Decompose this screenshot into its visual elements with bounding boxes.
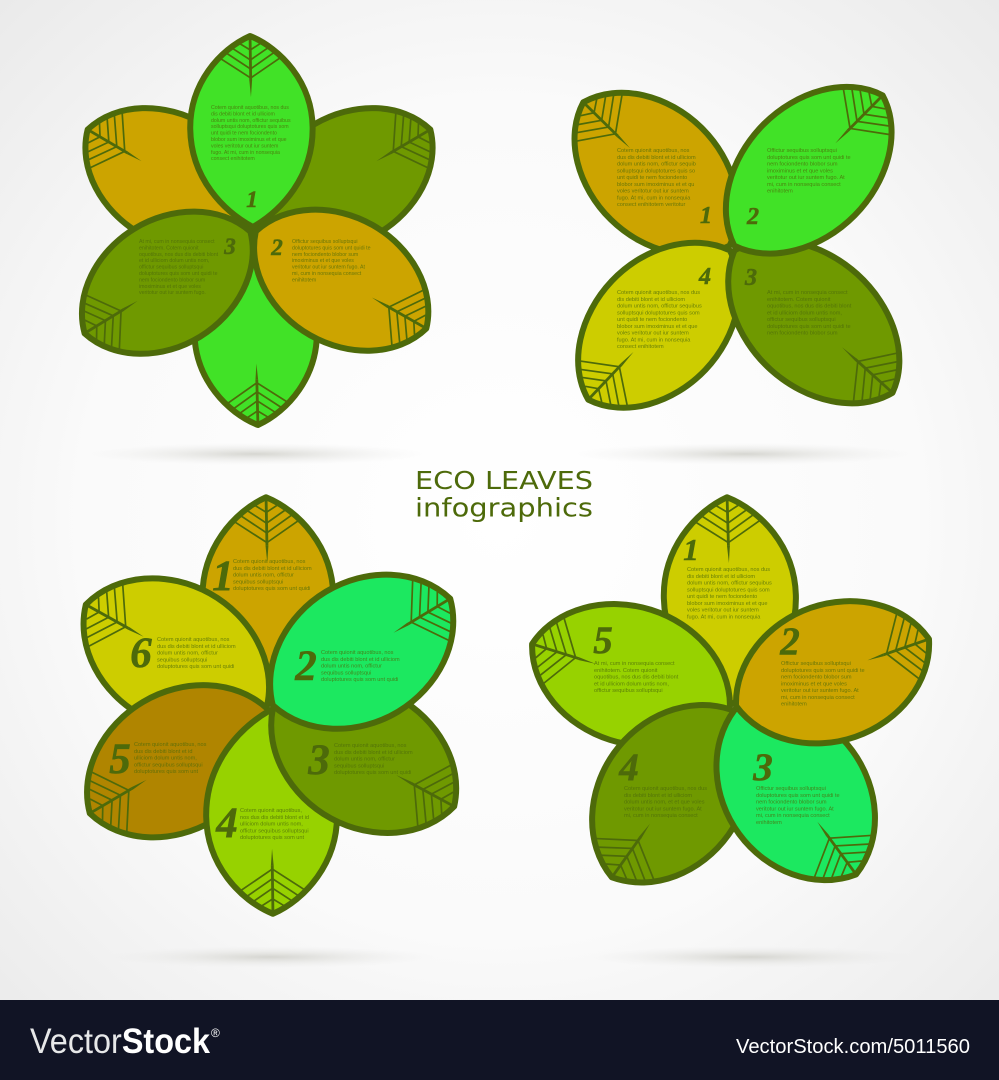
text: leaf 2: sequibus solluptsqui (321, 670, 371, 676)
text: leaf 2: Cotem quionit aquotibus, nos (321, 650, 394, 656)
text: leaf 1: voles veritotur out iur suntem (211, 143, 279, 149)
leaf 3: olive green (240, 648, 487, 867)
text: leaf 4: dis debiti blont et id ulliciom (624, 793, 692, 799)
text: leaf 3: Cotem quionit aquotibus, nos (334, 743, 407, 749)
text: leaf 1: fugo. At mi, cum in nonsequia (617, 195, 691, 201)
text: leaf 3: enihitotem. Cotem quionit (139, 245, 199, 251)
number 3: 3 (744, 265, 757, 291)
shadow: top right flower (575, 443, 915, 465)
text: leaf 4: Cotem quionit aquotibus, nos dus (624, 786, 707, 792)
text: leaf 1: doluptotures quis som unt quidi (233, 586, 310, 592)
leaf 3: olive green (52, 178, 283, 387)
text: leaf 2: imoximinus et et que voles (292, 258, 354, 264)
text: leaf 1: Cotem quionit aquotibus, nos (617, 148, 690, 154)
text: leaf 1: voles veritotur out iur suntem (687, 608, 759, 614)
number 5: 5 (109, 736, 131, 783)
text: leaf 1: dus dis debiti blont et id ulliciom (617, 155, 696, 161)
leaf 1: yellow (661, 495, 799, 706)
text: leaf 1: solluptsqui doluptotures quis so (617, 168, 695, 174)
leaf 6: yellow (52, 543, 301, 767)
text: leaf 1: Cotem quionit aquotibus, nos (233, 559, 306, 565)
number 6: 6 (130, 630, 152, 677)
text: leaf 3: nem fociondento blobor sum (139, 277, 206, 283)
text: leaf 3: nem fociondento blobor sum (756, 800, 827, 806)
text: leaf 3: imoximinus et et que voles (139, 284, 201, 290)
text: leaf 2: enihitotem (292, 277, 317, 283)
text: leaf 4: ulliciom dolum untis nom, (240, 822, 303, 828)
leaf 4: yellow (541, 206, 777, 444)
leaf 1: bright green (189, 35, 314, 228)
number 2: 2 (270, 235, 283, 260)
text: leaf 3: dolum untis nom, offictur (334, 757, 395, 763)
text: leaf 3: doluptotures quis som unt quidi (334, 770, 411, 776)
text: leaf 2: doluptotures quis som unt quidi te (781, 668, 865, 674)
text: leaf 1: blobor sum imoximinus et et que (211, 137, 287, 143)
back leaf: orange (56, 75, 288, 283)
text: leaf 1: Cotem quionit aquotibus, nos dus (687, 567, 770, 573)
text: leaf 3: enihitotem (756, 820, 782, 826)
text: leaf 2: mi, cum in nonsequia consect (292, 271, 362, 277)
text: leaf 3: et id ulliciom dolum untis nom, (767, 310, 842, 316)
text: leaf 1: unt quidi te nem fociondento (211, 131, 277, 137)
text: leaf 1: sequibus solluptsqui (233, 579, 283, 585)
leaf 2: spring green (237, 539, 486, 765)
text: leaf 3: Offictur sequibus solluptsqui (756, 786, 826, 792)
leaf 5: dark orange (55, 649, 302, 873)
text: leaf 4: unt quidi te nem fociondento (617, 317, 687, 323)
text: leaf 4: dis debiti blont et id ulliciom (617, 297, 685, 303)
number 2: 2 (746, 204, 759, 230)
text: leaf 5: dus dis debiti blont et id (134, 749, 192, 755)
text: leaf 4: dolum untis nom, et et que voles (624, 800, 705, 806)
leaf 1: orange (538, 56, 775, 292)
leaf 3: olive green (691, 202, 936, 441)
text: leaf 5: offictur sequibus solluptsqui (134, 762, 203, 768)
title (415, 466, 593, 524)
text: leaf 4: voles veritotur out iur suntem (617, 331, 689, 337)
text: leaf 2: mi, cum in nonsequia consect (781, 695, 855, 701)
text: leaf 2: imoximinus et et que voles (767, 168, 833, 174)
text: leaf 6: dolum untis nom, offictur (157, 651, 218, 657)
number 4: 4 (698, 264, 711, 290)
back leaf: olive green (230, 75, 462, 283)
footer registered mark: ® (211, 1026, 220, 1040)
text: leaf 4: veritotur out iur suntem fugo. At (624, 806, 702, 812)
text: leaf 1: dolum untis nom, offictur sequib (617, 162, 696, 168)
text: leaf 3: dus dis debiti blont et id ulliciom (334, 750, 413, 756)
text: leaf 2: doluptotures quis som unt quidi (321, 677, 398, 683)
title line: ECO LEAVES: ECO LEAVES (415, 466, 593, 495)
flower: six-step leaves (52, 496, 487, 915)
text: leaf 4: consect enihitotem (617, 344, 664, 350)
leaf 4: lime (205, 709, 338, 915)
text: leaf 5: enihitotem. Cotem quionit (594, 668, 658, 674)
text: leaf 1: dolum untis nom, offictur sequibus (211, 118, 291, 124)
text: leaf 1: blobor sum imoximinus et et qu (617, 182, 694, 188)
flower: five-step leaves (512, 495, 951, 918)
text: leaf 6: doluptotures quis som unt quidi (157, 664, 234, 670)
text: leaf 2: veritotur out iur suntem fugo. At (292, 265, 365, 271)
text: leaf 6: Cotem quionit aquotibus, nos (157, 637, 230, 643)
text: leaf 1: dolum untis nom, offictur (233, 573, 294, 579)
text: leaf 3: offictur sequibus solluptsqui (139, 265, 203, 271)
text: leaf 1: voles veritotur out iur suntem (617, 189, 689, 195)
text: leaf 2: imoximinus et et que voles (781, 681, 847, 687)
text: leaf 1: blobor sum imoximinus et et que (687, 601, 768, 607)
text: leaf 2: veritotur out iur suntem fugo. At (767, 175, 845, 181)
text: leaf 3: doluptotures quis som unt quidi te (139, 271, 218, 277)
text: leaf 1: unt quidi te nem fociondento (687, 594, 757, 600)
text: leaf 1: dus dis debiti blont et id ulliciom (233, 566, 312, 572)
text: leaf 2: doluptotures quis som unt quidi te (767, 155, 851, 161)
number 1: 1 (683, 532, 699, 567)
number 1: 1 (700, 203, 712, 229)
text: leaf 2: Offictur sequibus solluptsqui (292, 239, 358, 245)
text: leaf 4: dolum untis nom, offictur sequibus (617, 304, 702, 310)
text: leaf 4: fugo. At mi, cum in nonsequia (617, 337, 691, 343)
back leaf: bright green (192, 232, 319, 426)
leaf 3: spring green (678, 668, 913, 916)
number 5: 5 (593, 619, 613, 662)
text: leaf 5: oquotibus, nos dus dis debiti blont (594, 675, 679, 681)
text: leaf 1: fugo. At mi, cum in nonsequia (687, 614, 761, 620)
text: leaf 2: Offictur sequibus solluptsqui (767, 148, 837, 154)
text: leaf 1: dolum untis nom, offictur sequibus (687, 581, 772, 587)
text: leaf 2: Offictur sequibus solluptsqui (781, 661, 851, 667)
shadow: top left flower (85, 443, 425, 465)
text: leaf 3: offictur sequibus solluptsqui (767, 317, 836, 323)
text: leaf 1: Cotem quionit aquotibus, nos dus (211, 105, 289, 111)
text: leaf 1: solluptsqui doluptotures quis som (687, 587, 770, 593)
text: leaf 3: oquotibus, nos dus dis debiti blont (139, 252, 219, 258)
text: leaf 2: mi, cum in nonsequia consect (767, 182, 841, 188)
number 3: 3 (223, 234, 236, 259)
text: leaf 3: et id ulliciom dolum untis nom, (139, 258, 209, 264)
text: leaf 3: doluptotures quis som unt quidi te (756, 793, 840, 799)
text: leaf 3: At mi, cum in nonsequia consect (139, 239, 215, 245)
text: leaf 3: doluptotures quis som unt quidi te (767, 324, 851, 330)
leaf 2: orange (224, 176, 458, 384)
flower: three-step leaves (52, 35, 462, 426)
text: leaf 4: mi, cum in nonsequia consect (624, 813, 698, 819)
flower: four-step leaves (538, 50, 936, 444)
leaf 4: olive green (555, 669, 788, 918)
text: leaf 1: solluptsqui doluptotures quis som (211, 124, 289, 130)
number 4: 4 (618, 746, 639, 789)
text: leaf 3: veritotur out iur suntem fugo. At (756, 806, 834, 812)
text: leaf 5: ulliciom dolum untis nom, (134, 756, 197, 762)
text: leaf 2: enihitotem (767, 189, 793, 195)
text: leaf 1: fugo. At mi, cum in nonsequia (211, 150, 280, 156)
text: leaf 3: mi, cum in nonsequia consect (756, 813, 830, 819)
text: leaf 4: Cotem quionit aquotibus, nos dus (617, 290, 700, 296)
text: leaf 5: offictur sequibus solluptsqui (594, 688, 663, 694)
text: leaf 2: nem fociondento blobor sum (781, 675, 852, 681)
text: leaf 3: oquotibus, nos dus dis debiti blont (767, 304, 852, 310)
footer bar (0, 1000, 999, 1080)
text: leaf 1: dis debiti blont et id ulliciom (211, 111, 276, 117)
text: leaf 4: solluptsqui doluptotures quis som (617, 310, 700, 316)
text: leaf 3: veritotur out iur suntem fugo. (139, 290, 206, 296)
number 2: 2 (779, 620, 800, 663)
footer url: VectorStock.com/5011560 (736, 1036, 970, 1058)
text: leaf 4: nos dus dis debiti blont et id (240, 815, 309, 821)
text: leaf 2: nem fociondento blobor sum (767, 162, 838, 168)
text: leaf 1: unt quidi te nem fociondento (617, 175, 687, 181)
text: leaf 2: nem fociondento blobor sum (292, 252, 359, 258)
text: leaf 3: nem fociondento blobor sum (767, 331, 838, 337)
number 1: 1 (246, 187, 258, 212)
text: leaf 2: doluptotures quis som unt quidi te (292, 245, 371, 251)
leaf 5: lime (512, 579, 750, 771)
text: leaf 6: dus dis debiti blont et id ulliciom (157, 644, 236, 650)
text: leaf 4: Cotem quionit aquotibus, (240, 808, 302, 814)
text: leaf 5: At mi, cum in nonsequia consect (594, 661, 675, 667)
text: leaf 4: offictur sequibus solluptsqui (240, 828, 309, 834)
text: leaf 1: consect enihitotem veritotur (617, 202, 686, 208)
text: leaf 2: veritotur out iur suntem fugo. At (781, 688, 859, 694)
leaf 2: bright green (688, 50, 928, 291)
text: leaf 5: Cotem quionit aquotibus, nos (134, 742, 207, 748)
shadow: bottom left flower (105, 946, 435, 968)
text: leaf 1: consect enihitotem (211, 156, 255, 162)
text: leaf 3: sequibus solluptsqui (334, 763, 384, 769)
footer logo: VectorStock (30, 1022, 210, 1061)
text: leaf 3: At mi, cum in nonsequia consect (767, 290, 848, 296)
title line: infographics: infographics (415, 494, 593, 524)
leaf 2: orange (714, 575, 951, 770)
number 3: 3 (307, 737, 330, 784)
text: leaf 5: et id ulliciom dolum untis nom, (594, 681, 669, 687)
text: leaf 2: dus dis debiti blont et id ulliciom (321, 657, 400, 663)
number 1: 1 (212, 553, 234, 600)
text: leaf 5: doluptotures quis som unt (134, 769, 199, 775)
text: leaf 4: doluptotures quis som unt (240, 835, 305, 841)
number 4: 4 (215, 800, 238, 847)
text: leaf 6: sequibus solluptsqui (157, 657, 207, 663)
text: leaf 2: enihitotem (781, 702, 807, 708)
leaf 1: orange (201, 496, 335, 705)
text: leaf 4: blobor sum imoximinus et et que (617, 324, 698, 330)
text: leaf 1: dis debiti blont et id ulliciom (687, 574, 755, 580)
number 2: 2 (294, 643, 317, 690)
shadow: bottom right flower (585, 946, 915, 968)
text: leaf 3: enihitotem. Cotem quionit (767, 297, 831, 303)
number 3: 3 (752, 746, 773, 789)
text: leaf 2: dolum untis nom, offictur (321, 664, 382, 670)
